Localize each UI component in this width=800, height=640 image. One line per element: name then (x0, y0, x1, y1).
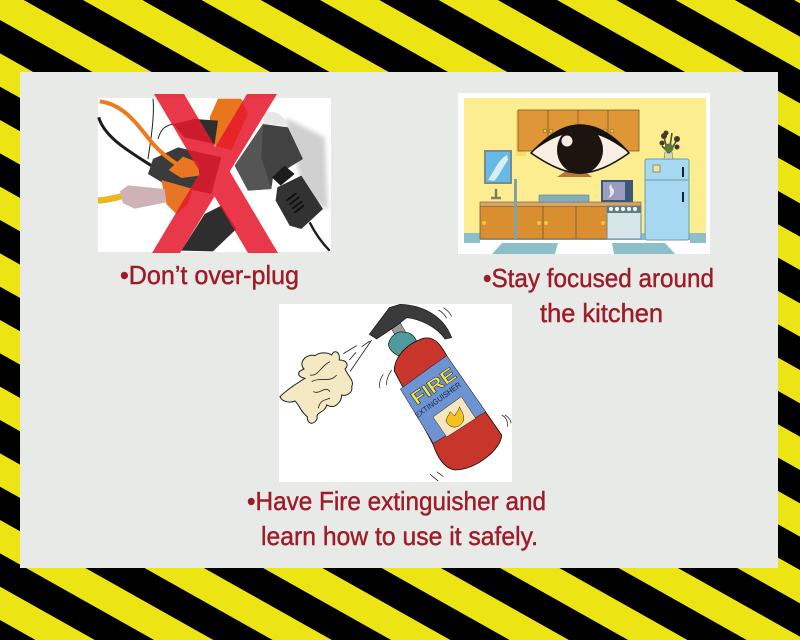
EXTINGUISHER label: EXTINGUISHER (413, 380, 463, 420)
floor (464, 233, 706, 254)
caption: have fire extinguisher: learn how to use it safely. (261, 521, 538, 551)
upper cabinets (516, 110, 639, 156)
shake marks (380, 308, 511, 481)
right grey adapter (235, 124, 303, 191)
flowers in vase (660, 130, 680, 159)
top orange plug (210, 99, 248, 151)
fridge (645, 159, 689, 240)
giant eye (531, 125, 629, 177)
translucent plug (120, 185, 166, 209)
caption: stay focused around the kitchen: •Stay focused around (483, 263, 714, 293)
foam cloud (280, 352, 352, 423)
yellow cable (98, 196, 124, 201)
caption: don't over-plug: •Don’t over-plug (120, 260, 299, 290)
caption: stay focused around the kitchen: the kitchen (540, 298, 663, 328)
orange cable (100, 101, 180, 166)
stove top (539, 195, 589, 202)
nozzle and handle (369, 304, 452, 339)
oven (607, 206, 641, 239)
wall shadow (285, 117, 328, 211)
flame (446, 407, 464, 427)
caption: have fire extinguisher (247, 486, 546, 551)
image: overloaded power plugs crossed out (98, 98, 331, 252)
red X mark (152, 94, 278, 253)
bottom black box (181, 206, 236, 251)
lower orange socket (161, 180, 193, 214)
foam inner lines (310, 362, 337, 408)
thin black wires (148, 99, 173, 159)
mirror (485, 151, 511, 183)
lower counter and cabinets (480, 179, 641, 239)
black cable (99, 117, 185, 182)
image: fire extinguisher spraying (279, 304, 512, 482)
microwave (601, 180, 633, 202)
faucet (491, 189, 501, 199)
plug cord (310, 222, 330, 251)
top black socket (173, 119, 218, 144)
red body (394, 338, 502, 470)
main grey panel (20, 72, 778, 568)
beige flame panel (433, 397, 476, 437)
caption: stay focused around the kitchen (483, 263, 714, 328)
spray lines (343, 340, 372, 372)
teal neck (388, 332, 418, 356)
orange plug (169, 157, 200, 178)
blue label band (400, 356, 486, 443)
black plug (276, 176, 323, 229)
image: kitchen with eye (458, 93, 710, 254)
grey valve stem (391, 323, 406, 339)
caption: have fire extinguisher: •Have Fire extinguisher and (247, 486, 546, 516)
power strip (148, 147, 221, 194)
FIRE label: FIRE (407, 363, 460, 409)
